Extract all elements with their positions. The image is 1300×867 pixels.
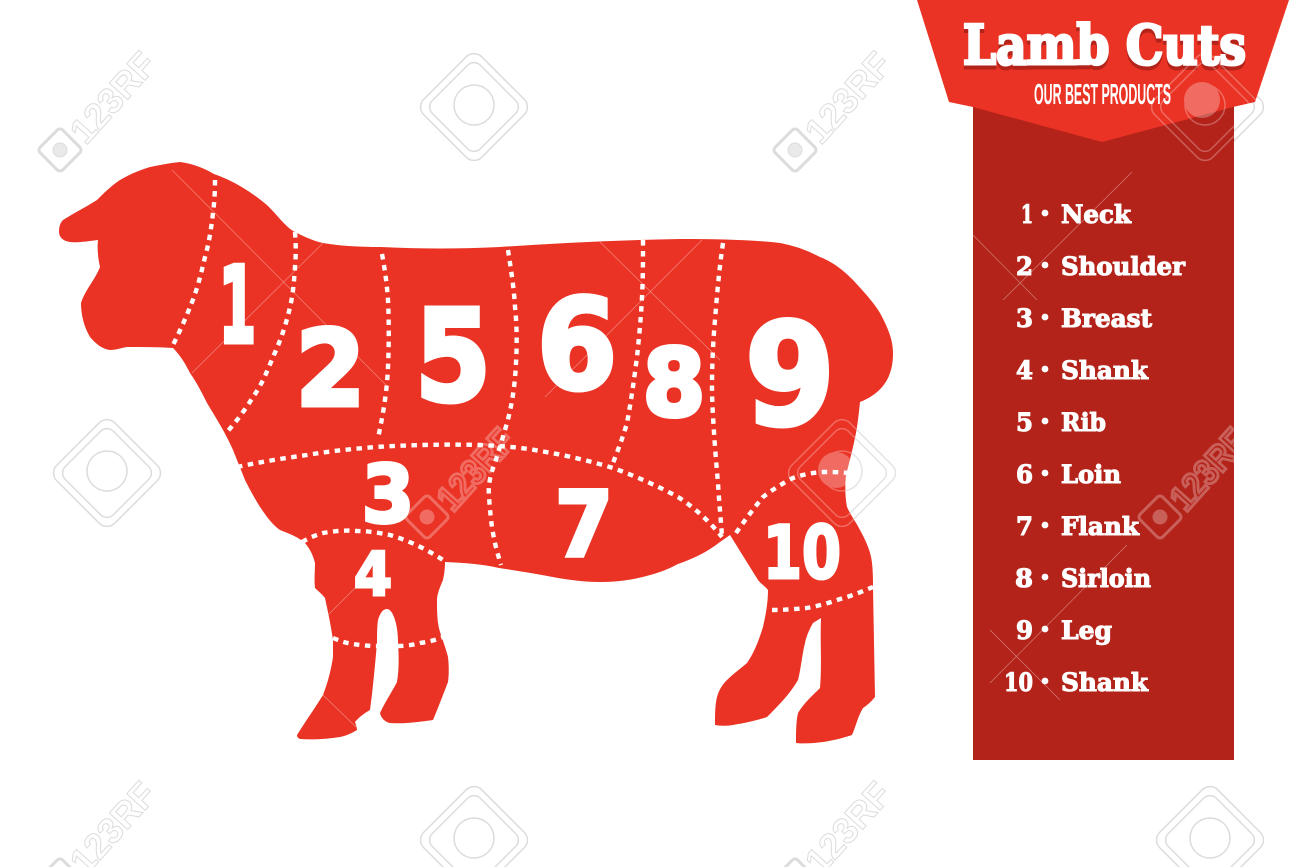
legend item 4 [1016, 356, 1149, 385]
watermarks over red shapes [404, 49, 1263, 540]
cut numbers on lamb: 1 [219, 245, 256, 367]
legend item 4: 4 [1016, 356, 1033, 385]
legend item 7 [1016, 512, 1140, 541]
cut numbers on lamb: 7 [555, 473, 613, 578]
legend item 6 [1016, 460, 1121, 489]
legend item 5 [1016, 408, 1106, 437]
header banner [917, 0, 1289, 142]
legend item 9: Leg [1061, 616, 1112, 645]
legend item 5: Rib [1061, 408, 1106, 437]
legend item 1: Neck [1061, 200, 1132, 229]
legend panel [973, 100, 1234, 760]
cut numbers on lamb: 3 [362, 449, 414, 541]
cut numbers on lamb: 8 [643, 329, 705, 437]
legend item 10: 10 [1004, 668, 1033, 697]
cut numbers on lamb: 5 [415, 282, 491, 430]
dashed cut lines [172, 180, 873, 646]
legend item 3 [1016, 304, 1152, 333]
legend item 5: 5 [1016, 408, 1033, 437]
watermarks on background: 123RF [796, 44, 899, 151]
legend item 7: Flank [1061, 512, 1140, 541]
legend list [1004, 200, 1186, 697]
legend item 3: 3 [1016, 304, 1033, 333]
title: Lamb Cuts [963, 17, 1246, 81]
legend item 9 [1016, 616, 1112, 645]
legend item 2: Shoulder [1061, 252, 1186, 281]
legend item 1 [1021, 200, 1132, 229]
cut numbers on lamb [219, 245, 841, 610]
legend item 4: Shank [1061, 356, 1149, 385]
watermarks over red shapes: 123RF [428, 420, 523, 518]
cut numbers on lamb: 6 [537, 273, 617, 418]
cut numbers on lamb: 9 [745, 294, 835, 458]
legend item 8 [1015, 564, 1151, 593]
cut numbers on lamb: 2 [296, 308, 365, 430]
lamb silhouette [59, 162, 893, 743]
watermarks over red shapes: 123RF [1161, 420, 1256, 518]
watermarks on background: 123RF [61, 44, 164, 151]
legend item 8: 8 [1015, 564, 1033, 593]
legend item 6: Loin [1061, 460, 1121, 489]
legend item 10 [1004, 668, 1149, 697]
legend item 7: 7 [1016, 512, 1033, 541]
legend item 10: Shank [1061, 668, 1149, 697]
legend item 3: Breast [1061, 304, 1152, 333]
legend item 6: 6 [1016, 460, 1033, 489]
legend item 9: 9 [1016, 616, 1033, 645]
cut numbers on lamb: 10 [763, 511, 841, 596]
legend item 8: Sirloin [1061, 564, 1151, 593]
cut numbers on lamb: 4 [354, 540, 392, 610]
legend item 2: 2 [1016, 252, 1033, 281]
legend item 1: 1 [1021, 200, 1033, 229]
title: Lamb Cuts [963, 13, 1246, 77]
